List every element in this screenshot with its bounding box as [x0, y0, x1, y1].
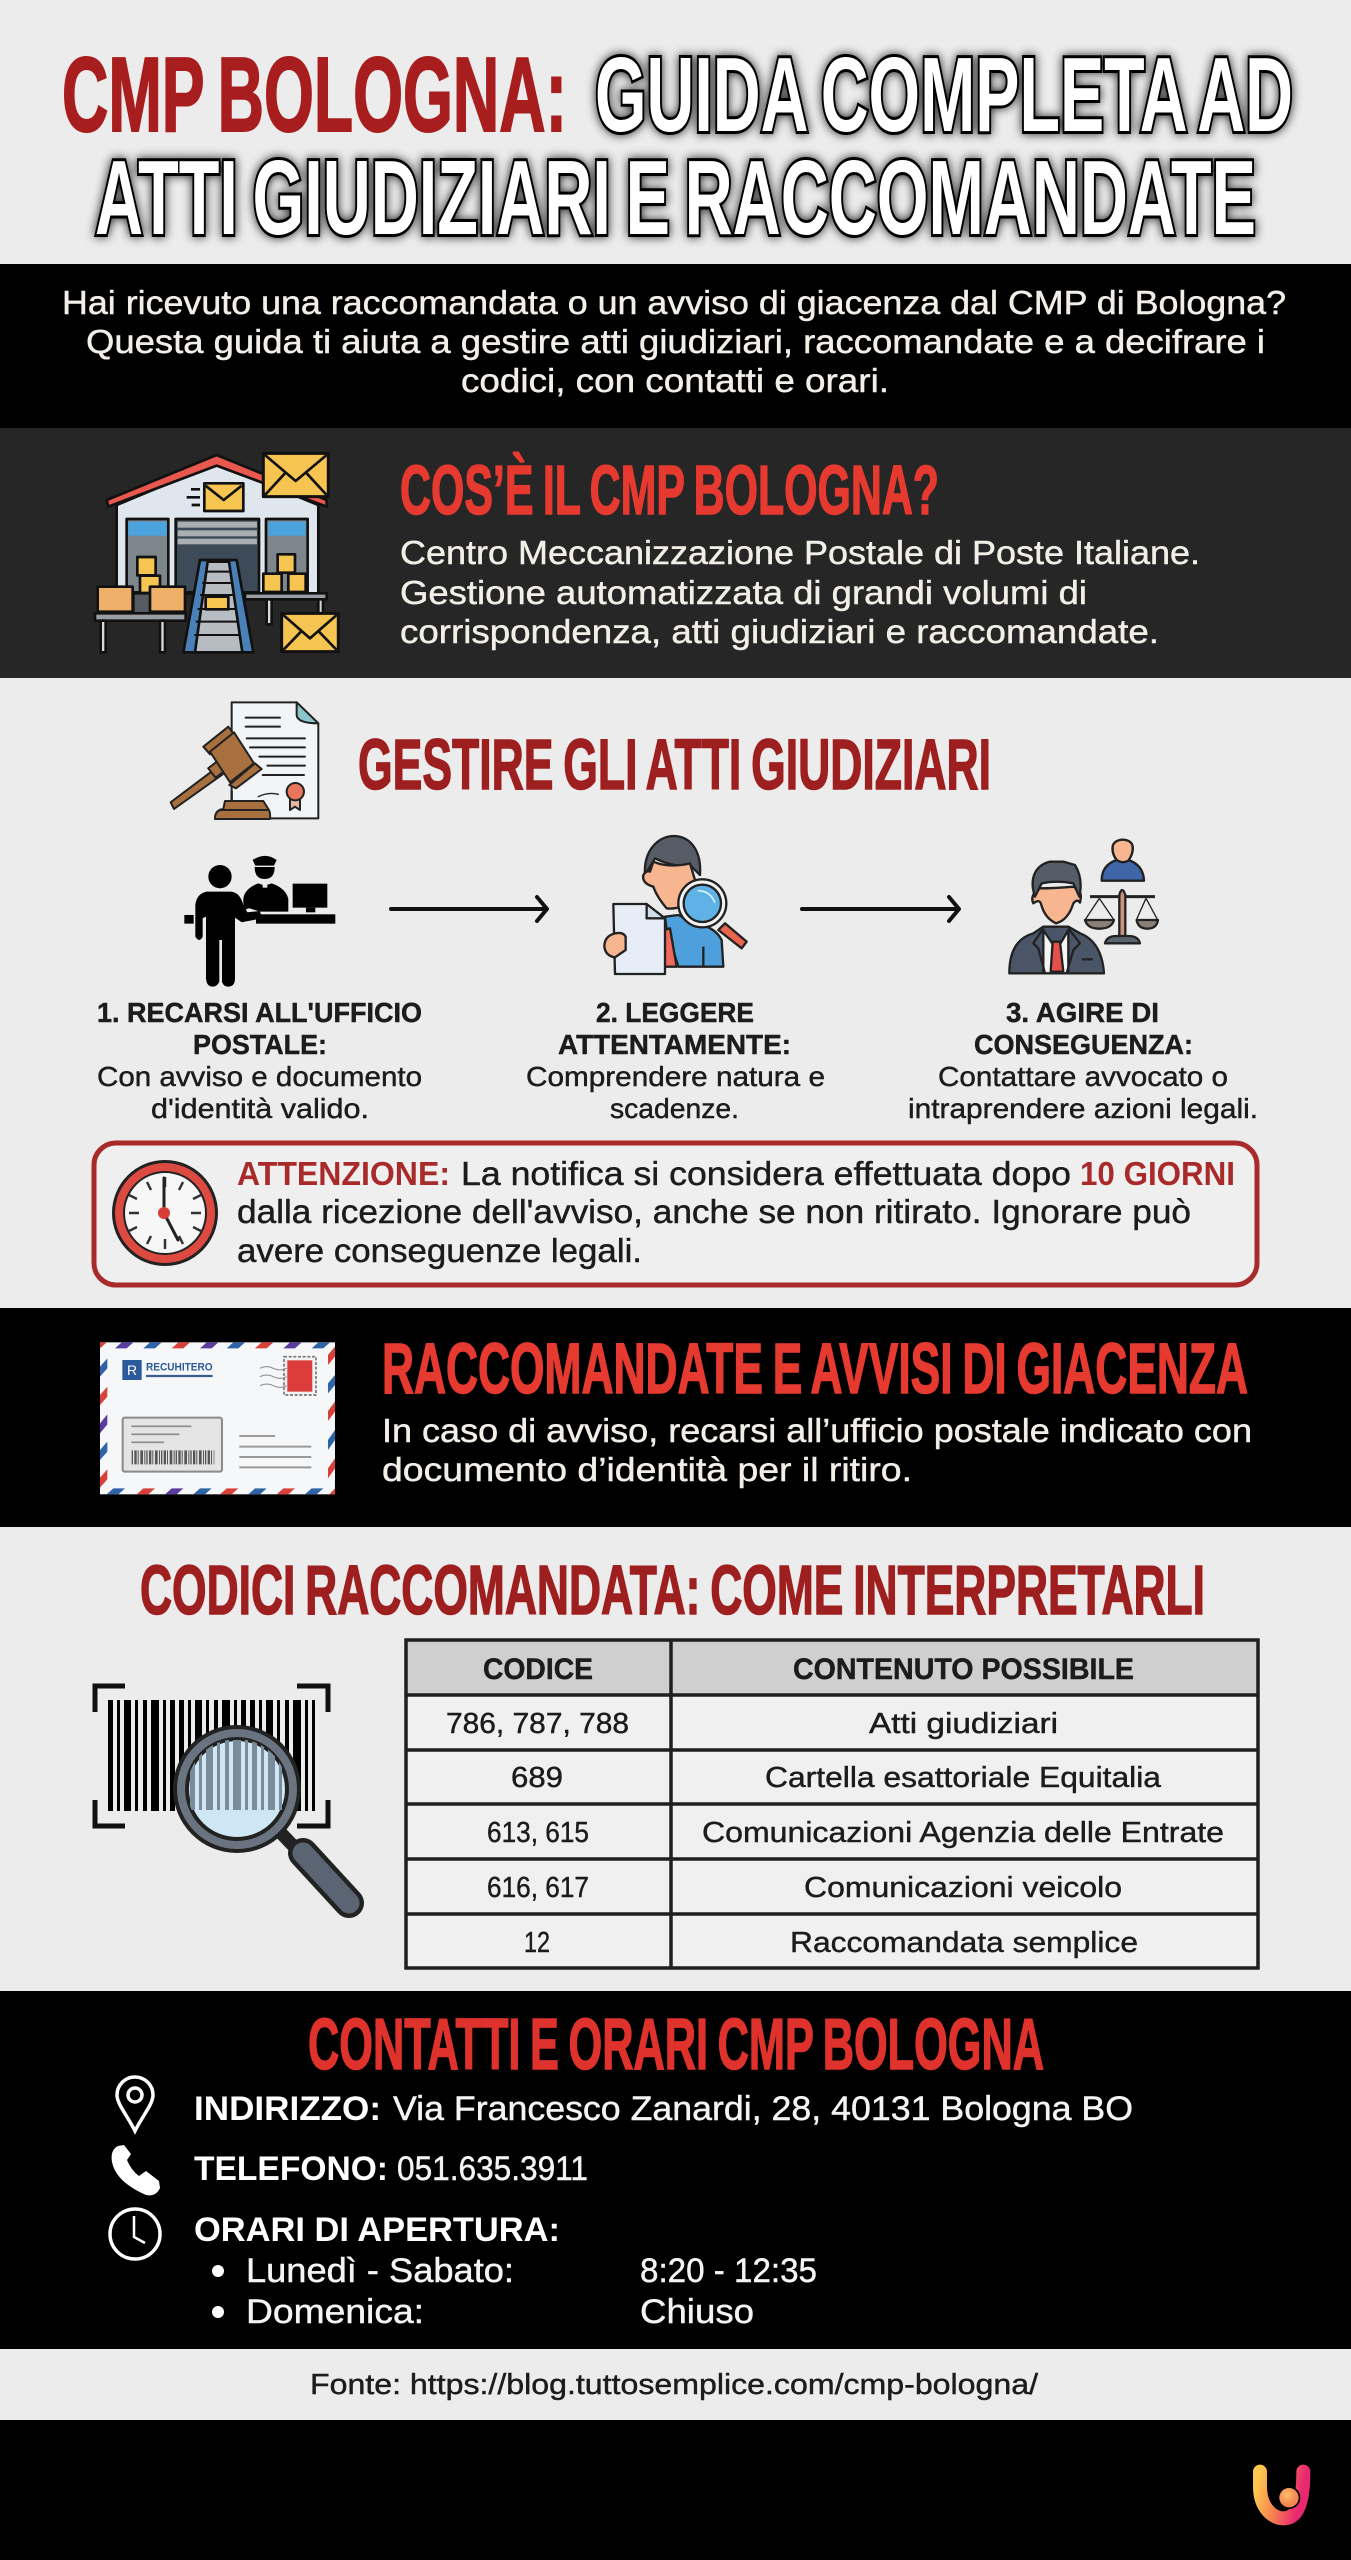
- row 689: Cartella esattoriale Equitalia: [765, 1762, 1162, 1794]
- label: registered mark: [122, 1360, 213, 1380]
- step 2 text: [526, 997, 825, 1124]
- table: codes: [406, 1640, 1258, 1969]
- step 3 text: CONSEGUENZA:: [974, 1029, 1193, 1060]
- description: corrispondenza, atti giudiziari e raccomandate.: [400, 613, 1159, 650]
- step 2 text: Comprendere natura e: [526, 1061, 825, 1092]
- icon: airmail envelope: [100, 1342, 335, 1494]
- row 12: 12: [524, 1927, 550, 1959]
- header row: CONTENUTO POSSIBILE: [793, 1653, 1134, 1686]
- panel: introduction: codici, con contatti e orari.: [461, 362, 889, 399]
- panel: introduction: Hai ricevuto una raccomandata o un avviso di giacenza dal CMP di Bologna?: [62, 284, 1286, 321]
- icon: gavel and document: [171, 702, 318, 819]
- heading: GESTIRE GLI ATTI GIUDIZIARI: [358, 726, 991, 805]
- opening hours: 8:20 - 12:35: [640, 2252, 817, 2290]
- arrow 1: [391, 897, 547, 921]
- icon: barcode with magnifier: [95, 1686, 349, 1903]
- row 786: 786, 787, 788: [446, 1708, 629, 1740]
- description: In caso di avviso, recarsi all’ufficio postale indicato con: [382, 1412, 1252, 1449]
- header row: [483, 1653, 1134, 1686]
- telephone: [194, 2150, 588, 2188]
- callout: attenzione: [94, 1143, 1257, 1285]
- telephone: 051.635.3911: [397, 2150, 588, 2188]
- panel: codici raccomandata: [0, 1527, 1351, 1991]
- step 1 text: POSTALE:: [193, 1029, 327, 1060]
- icon: person with magnifier: [604, 836, 747, 974]
- panel: introduction: Questa guida ti aiuta a gestire atti giudiziari, raccomandate e a decifrare i: [86, 323, 1265, 360]
- step 3 text: intraprendere azioni legali.: [908, 1093, 1258, 1124]
- callout text: avere conseguenze legali.: [237, 1232, 642, 1269]
- row 613: [487, 1817, 1224, 1849]
- heading: COS’È IL CMP BOLOGNA?: [400, 451, 939, 529]
- icon: phone: [112, 2145, 160, 2195]
- opening hours: Chiuso: [640, 2293, 754, 2331]
- icon: clock: [112, 1160, 218, 1266]
- step 2 text: 2. LEGGERE: [596, 997, 754, 1028]
- panel: contatti e orari: [0, 1991, 1351, 2349]
- icon: logo: [1260, 2472, 1303, 2518]
- panel: gestire gli atti giudiziari: [0, 678, 1351, 1308]
- label: registered mark: R: [127, 1362, 137, 1378]
- panel: introduction: [0, 264, 1351, 428]
- row 12: Raccomandata semplice: [790, 1927, 1138, 1959]
- opening hours: Lunedì - Sabato:: [246, 2252, 514, 2290]
- icon: person at post office counter: [184, 856, 335, 987]
- telephone: TELEFONO:: [194, 2150, 388, 2188]
- row 613: 613, 615: [487, 1817, 589, 1849]
- row 12: [524, 1927, 1138, 1959]
- step 1 text: [97, 997, 422, 1124]
- callout text: dalla ricezione dell'avviso, anche se non ritirato. Ignorare può: [237, 1193, 1191, 1230]
- description: [400, 534, 1200, 650]
- panel: raccomandate e avvisi di giacenza: [0, 1308, 1351, 1527]
- row 616: Comunicazioni veicolo: [804, 1872, 1122, 1904]
- title text: CMP Bologna: CMP BOLOGNA:: [62, 36, 567, 154]
- opening hours: Domenica:: [246, 2293, 424, 2331]
- row 786: [446, 1708, 1058, 1740]
- description: Gestione automatizzata di grandi volumi di: [400, 574, 1087, 611]
- header row: CODICE: [483, 1653, 593, 1686]
- row 616: 616, 617: [487, 1872, 589, 1904]
- callout text: 10 GIORNI: [1080, 1155, 1235, 1192]
- step 1 text: Con avviso e documento: [97, 1061, 422, 1092]
- row 616: [487, 1872, 1122, 1904]
- panel: cos'e il CMP: [0, 428, 1351, 678]
- icon: clock: [110, 2209, 160, 2259]
- address: INDIRIZZO:: [194, 2090, 381, 2128]
- icon: location pin: [117, 2077, 153, 2131]
- row 613: Comunicazioni Agenzia delle Entrate: [702, 1817, 1224, 1849]
- address: Via Francesco Zanardi, 28, 40131 Bologna BO: [393, 2090, 1133, 2128]
- row 786: Atti giudiziari: [869, 1708, 1058, 1740]
- description: [382, 1412, 1252, 1488]
- panel: source: Fonte: https://blog.tuttosemplice.com/cmp-bologna/: [310, 2369, 1039, 2401]
- step 1 text: 1. RECARSI ALL'UFFICIO: [97, 997, 422, 1028]
- opening hours: [194, 2211, 817, 2331]
- callout text: [237, 1155, 1235, 1269]
- row 689: 689: [511, 1762, 563, 1794]
- arrow 2: [802, 897, 959, 921]
- step 3 text: 3. AGIRE DI: [1006, 997, 1159, 1028]
- step 3 text: Contattare avvocato o: [938, 1061, 1228, 1092]
- step 2 text: ATTENTAMENTE:: [558, 1029, 791, 1060]
- description: Centro Meccanizzazione Postale di Poste Italiane.: [400, 534, 1200, 571]
- icon: lawyer with scales: [1009, 840, 1158, 973]
- callout text: ATTENZIONE:: [237, 1155, 450, 1192]
- step 1 text: d'identità valido.: [151, 1093, 369, 1124]
- label: registered mark: RECUHITERO: [146, 1361, 213, 1373]
- opening hours: ORARI DI APERTURA:: [194, 2211, 560, 2249]
- row 689: [511, 1762, 1162, 1794]
- icon: postal warehouse: [95, 453, 338, 652]
- description: documento d’identità per il ritiro.: [382, 1451, 912, 1488]
- step 3 text: [908, 997, 1258, 1124]
- step 2 text: scadenze.: [610, 1093, 739, 1124]
- callout text: La notifica si considera effettuata dopo: [461, 1155, 1071, 1192]
- panel: source: [0, 2349, 1351, 2420]
- panel: title: [0, 0, 1351, 264]
